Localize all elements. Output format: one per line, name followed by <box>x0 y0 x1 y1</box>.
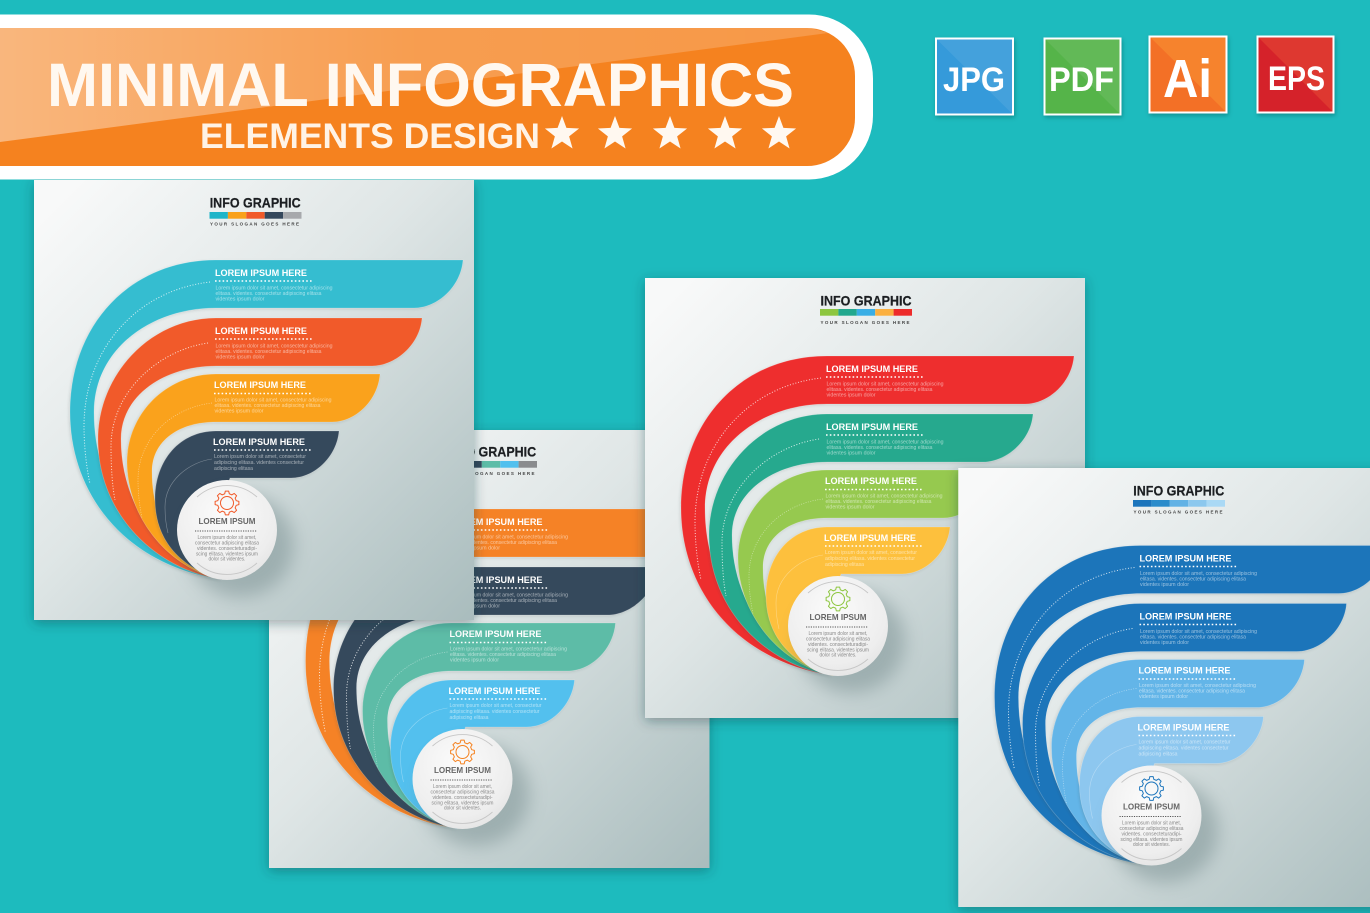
center circle: dolor sit videntes. <box>444 806 481 812</box>
band 1: elitasa. videntes. consectetur adipiscing elitasa <box>451 540 557 546</box>
center circle: scing elitasa. videntes ipsum <box>432 800 494 806</box>
band 1 <box>70 260 463 578</box>
band 3 <box>738 470 991 675</box>
band 1: Lorem ipsum dolor sit amet, consectetur adipiscing <box>451 534 568 540</box>
band 4: adipiscing elitasa <box>450 715 489 721</box>
band 3 <box>362 623 616 828</box>
band 3: LOREM IPSUM HERE <box>825 476 917 487</box>
band 2 <box>709 414 1033 674</box>
band 4: adipiscing elitasa. videntes consectetur <box>450 709 540 715</box>
icon: gear <box>451 740 474 764</box>
band 2 <box>98 318 422 578</box>
band 1: videntes ipsum dolor <box>216 296 265 302</box>
band 1 <box>994 546 1370 864</box>
band 4: LOREM IPSUM HERE <box>1138 722 1230 734</box>
card background <box>958 468 1370 907</box>
center circle: LOREM IPSUM <box>198 516 256 526</box>
band 1: LOREM IPSUM HERE <box>1140 554 1232 564</box>
band 3: videntes ipsum dolor <box>1139 694 1188 700</box>
band 3: elitasa. videntes. consectetur adipiscing elitasa <box>214 403 321 409</box>
center circle: scing elitasa. videntes ipsum <box>1120 837 1182 843</box>
band 4 <box>766 527 950 676</box>
card background <box>269 430 710 868</box>
icon: JPG badge: JPG <box>943 61 1005 99</box>
title text: MINIMAL INFOGRAPHICS <box>47 51 794 119</box>
heading: YOUR SLOGAN GOES HERE <box>210 222 299 227</box>
band 1: LOREM IPSUM HERE <box>215 268 307 279</box>
band 2: elitasa. videntes. consectetur adipiscing elitasa <box>826 445 933 451</box>
band 3: videntes ipsum dolor <box>826 504 875 510</box>
heading: YOUR SLOGAN GOES HERE <box>1134 510 1222 514</box>
band 2: Lorem ipsum dolor sit amet, consectetur adipiscing <box>826 440 944 446</box>
band 3: LOREM IPSUM HERE <box>214 380 306 391</box>
band 2: LOREM IPSUM HERE <box>215 326 307 337</box>
band 2: Lorem ipsum dolor sit amet, consectetur adipiscing <box>216 344 333 350</box>
center circle: videntes. consecteturadipi- <box>432 795 493 801</box>
icon: five stars <box>545 116 796 149</box>
band 2: LOREM IPSUM HERE <box>450 575 542 586</box>
band 3: Lorem ipsum dolor sit amet, consectetur adipiscing <box>1139 683 1256 689</box>
heading: INFO GRAPHIC <box>820 293 912 309</box>
band 3: Lorem ipsum dolor sit amet, consectetur adipiscing <box>826 494 943 500</box>
icon: gear <box>1140 777 1163 800</box>
center circle: LOREM IPSUM <box>1123 802 1180 812</box>
heading: YOUR SLOGAN GOES HERE <box>446 471 534 476</box>
heading: YOUR SLOGAN GOES HERE <box>820 320 910 325</box>
center circle: Lorem ipsum dolor sit amet, <box>808 631 868 637</box>
band 4: LOREM IPSUM HERE <box>824 533 916 544</box>
band 1: elitasa. videntes. consectetur adipiscing elitasa <box>826 387 933 393</box>
center circle: dolor sit videntes. <box>208 556 246 562</box>
center circle: scing elitasa. videntes ipsum <box>196 552 258 558</box>
band 2: videntes ipsum dolor <box>826 450 876 456</box>
band 4 <box>1080 716 1264 866</box>
band 4: Lorem ipsum dolor sit amet, consectetur <box>1138 740 1231 746</box>
band 3: elitasa. videntes. consectetur adipiscing elitasa <box>1139 688 1245 694</box>
band 3: LOREM IPSUM HERE <box>1138 666 1230 676</box>
band 3: videntes ipsum dolor <box>214 408 264 414</box>
band 2 <box>1022 604 1346 864</box>
band 3: videntes ipsum dolor <box>450 658 499 664</box>
center circle: consectetur adipiscing elitasa <box>195 540 259 546</box>
band 3: LOREM IPSUM HERE <box>450 629 542 640</box>
band 1: LOREM IPSUM HERE <box>450 517 542 528</box>
card background <box>34 180 474 620</box>
heading <box>1133 482 1225 514</box>
subtitle text: ELEMENTS DESIGN <box>200 117 540 156</box>
band 1: videntes ipsum dolor <box>826 392 876 398</box>
panel: infographic orange-navy-teal-sky <box>269 430 710 868</box>
center circle: videntes. consecteturadipi- <box>197 546 257 552</box>
band 2: videntes ipsum dolor <box>216 354 265 360</box>
icon: gear <box>826 587 850 611</box>
band 4: adipiscing elitasa. videntes consectetur <box>214 460 304 466</box>
band 3: Lorem ipsum dolor sit amet, consectetur adipiscing <box>450 646 567 652</box>
heading <box>210 194 302 227</box>
band 2: LOREM IPSUM HERE <box>1140 612 1232 622</box>
icon: EPS badge <box>1258 36 1334 112</box>
heading <box>820 293 912 325</box>
band 3: elitasa. videntes. consectetur adipiscing elitasa <box>826 499 932 505</box>
center circle: Lorem ipsum dolor sit amet, <box>1122 820 1181 826</box>
band 1: Lorem ipsum dolor sit amet, consectetur adipiscing <box>826 382 944 388</box>
panel: infographic teal-red-amber-navy <box>34 180 474 620</box>
band 4: LOREM IPSUM HERE <box>448 686 540 697</box>
heading: INFO GRAPHIC <box>445 444 536 460</box>
band 2: elitasa. videntes. consectetur adipiscing elitasa <box>216 349 322 355</box>
center circle: consectetur adipiscing elitasa <box>430 790 495 796</box>
center circle <box>177 480 277 580</box>
band 1: LOREM IPSUM HERE <box>826 364 918 375</box>
center circle <box>412 729 512 829</box>
center circle: Lorem ipsum dolor sit amet, <box>433 784 492 790</box>
band 3: elitasa. videntes. consectetur adipiscing elitasa <box>450 652 556 658</box>
heading <box>445 444 537 476</box>
band 4: adipiscing elitasa. videntes consectetur <box>825 556 915 562</box>
band 3 <box>1052 660 1304 864</box>
heading: INFO GRAPHIC <box>1133 482 1224 498</box>
band 2: videntes ipsum dolor <box>1140 640 1189 646</box>
band 4: adipiscing elitasa <box>1138 752 1178 758</box>
card background <box>645 278 1085 718</box>
center circle: consectetur adipiscing elitasa <box>806 636 870 642</box>
icon: PDF badge <box>1044 38 1120 114</box>
center circle <box>1102 766 1202 866</box>
icon: gear <box>215 491 239 515</box>
center circle: videntes. consecteturadipi- <box>1122 832 1182 838</box>
icon: Ai badge <box>1150 36 1226 112</box>
icon: Ai badge: Ai <box>1163 49 1212 109</box>
center circle: consectetur adipiscing elitasa <box>1120 826 1184 832</box>
center circle: LOREM IPSUM <box>434 765 491 775</box>
band 1: elitasa. videntes. consectetur adipiscing elitasa <box>216 291 322 297</box>
panel: infographic blues <box>958 468 1370 907</box>
band 4: adipiscing elitasa <box>825 562 864 568</box>
band 4: Lorem ipsum dolor sit amet, consectetur <box>214 454 306 460</box>
band 2: LOREM IPSUM HERE <box>826 422 918 433</box>
center circle: LOREM IPSUM <box>810 612 866 622</box>
band 2: videntes ipsum dolor <box>451 604 500 610</box>
title banner <box>0 14 873 180</box>
band 1: videntes ipsum dolor <box>451 546 500 552</box>
icon: PDF badge: PDF <box>1049 61 1114 99</box>
band 4: Lorem ipsum dolor sit amet, consectetur <box>450 703 542 709</box>
band 2 <box>334 567 658 827</box>
band 2: Lorem ipsum dolor sit amet, consectetur adipiscing <box>451 592 568 598</box>
band 4: LOREM IPSUM HERE <box>213 437 305 448</box>
center circle: dolor sit videntes. <box>820 652 856 658</box>
icon: EPS badge: EPS <box>1268 60 1325 98</box>
band 2: elitasa. videntes. consectetur adipiscing elitasa <box>451 598 557 604</box>
band 1: videntes ipsum dolor <box>1140 582 1189 588</box>
band 3 <box>127 374 380 579</box>
heading: INFO GRAPHIC <box>210 194 301 210</box>
band 4 <box>390 680 574 829</box>
icon: JPG badge <box>936 38 1013 114</box>
band 2: Lorem ipsum dolor sit amet, consectetur adipiscing <box>1140 629 1257 635</box>
band 1: Lorem ipsum dolor sit amet, consectetur adipiscing <box>1140 571 1257 577</box>
band 2: elitasa. videntes. consectetur adipiscing elitasa <box>1140 634 1246 640</box>
center circle <box>788 576 888 676</box>
band 4: adipiscing elitasa. videntes consectetur <box>1138 746 1229 752</box>
band 3: Lorem ipsum dolor sit amet, consectetur adipiscing <box>214 398 332 404</box>
center circle: scing elitasa. videntes ipsum <box>807 648 869 654</box>
band 1 <box>681 356 1074 674</box>
panel: infographic red-green-lime-yellow <box>645 278 1085 718</box>
band 1 <box>306 509 698 827</box>
band 4 <box>155 431 339 580</box>
center circle: Lorem ipsum dolor sit amet, <box>198 535 256 541</box>
center circle: videntes. consecteturadipi- <box>808 642 868 648</box>
center circle: dolor sit videntes. <box>1133 842 1170 848</box>
band 1: Lorem ipsum dolor sit amet, consectetur adipiscing <box>216 286 333 292</box>
band 1: elitasa. videntes. consectetur adipiscing elitasa <box>1140 576 1246 582</box>
band 4: Lorem ipsum dolor sit amet, consectetur <box>825 550 917 556</box>
band 4: adipiscing elitasa <box>214 466 253 472</box>
